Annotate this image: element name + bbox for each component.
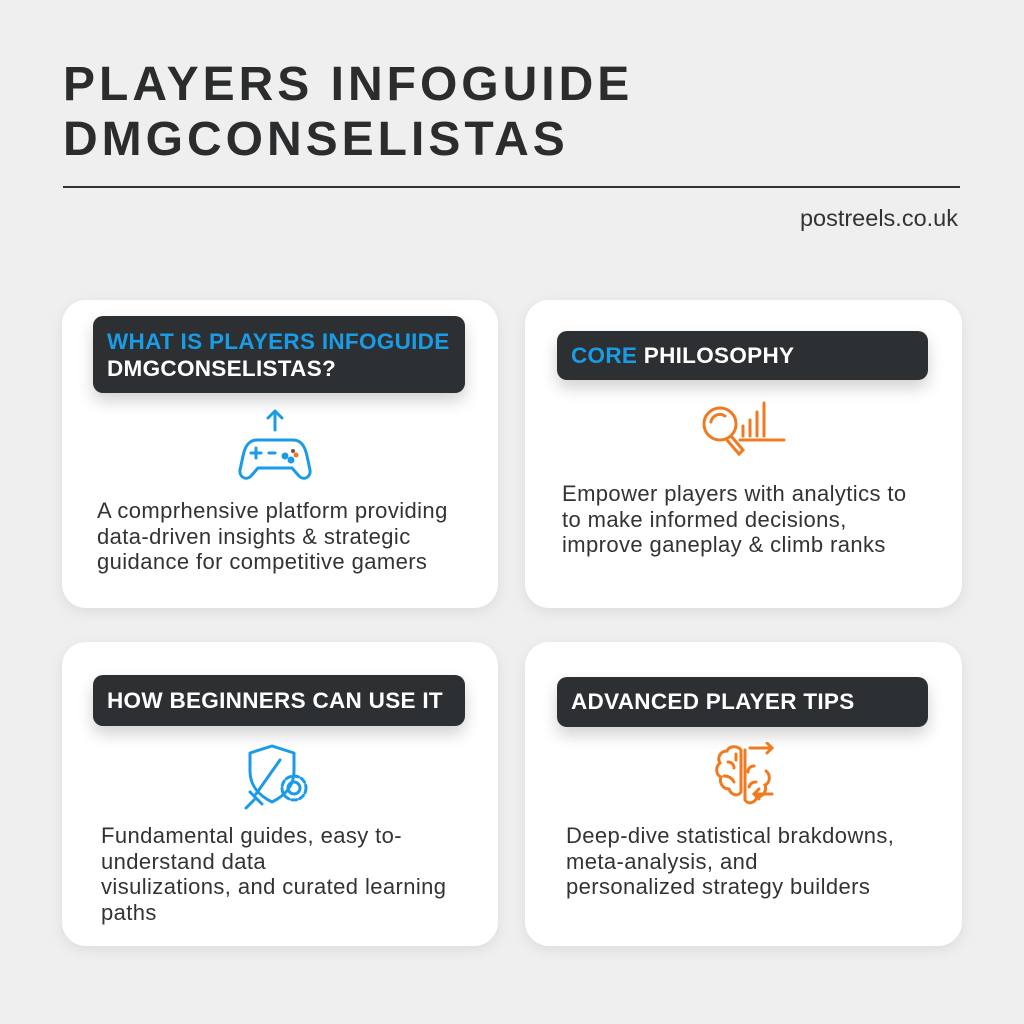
- text: [566, 823, 894, 899]
- text: Empower players with analytics to: [562, 481, 907, 506]
- text: [101, 823, 446, 924]
- heading: ADVANCED PLAYER TIPS: [571, 689, 855, 714]
- heading: HOW BEGINNERS CAN USE IT: [107, 688, 443, 713]
- icon: brain: [715, 742, 774, 804]
- text: [562, 481, 907, 557]
- panel: core philosophy: [525, 300, 962, 608]
- text: improve ganeplay & climb ranks: [562, 532, 886, 557]
- heading: DMGCONSELISTAS?: [107, 356, 336, 381]
- title: DMGCONSELISTAS: [63, 113, 569, 166]
- heading: [557, 677, 928, 727]
- icon: shield gear: [244, 744, 308, 810]
- title: PLAYERS INFOGUIDE: [63, 58, 633, 111]
- heading: [93, 316, 465, 393]
- text: to make informed decisions,: [562, 506, 847, 532]
- text: meta-analysis, and: [566, 848, 758, 874]
- panel: what is: [62, 300, 498, 608]
- heading: [557, 331, 928, 380]
- text: personalized strategy builders: [566, 874, 870, 899]
- title: [63, 58, 633, 166]
- text: data-driven insights & strategic: [97, 524, 411, 548]
- icon: magnifier chart: [702, 402, 786, 456]
- text: Deep-dive statistical brakdowns,: [566, 823, 894, 848]
- website: postreels.co.uk: [800, 205, 958, 231]
- heading: WHAT IS PLAYERS INFOGUIDE: [107, 329, 450, 354]
- text: paths: [101, 900, 157, 924]
- text: A comprhensive platform providing: [97, 498, 448, 523]
- text: guidance for competitive gamers: [97, 549, 427, 574]
- heading: [93, 675, 465, 726]
- text: understand data: [101, 848, 266, 874]
- text: [97, 498, 448, 574]
- icon: gamepad: [238, 409, 312, 480]
- text: Fundamental guides, easy to-: [101, 823, 402, 848]
- heading: CORE PHILOSOPHY: [571, 343, 794, 368]
- text: visulizations, and curated learning: [101, 874, 446, 899]
- panel: advanced: [525, 642, 962, 946]
- panel: beginners: [62, 642, 498, 946]
